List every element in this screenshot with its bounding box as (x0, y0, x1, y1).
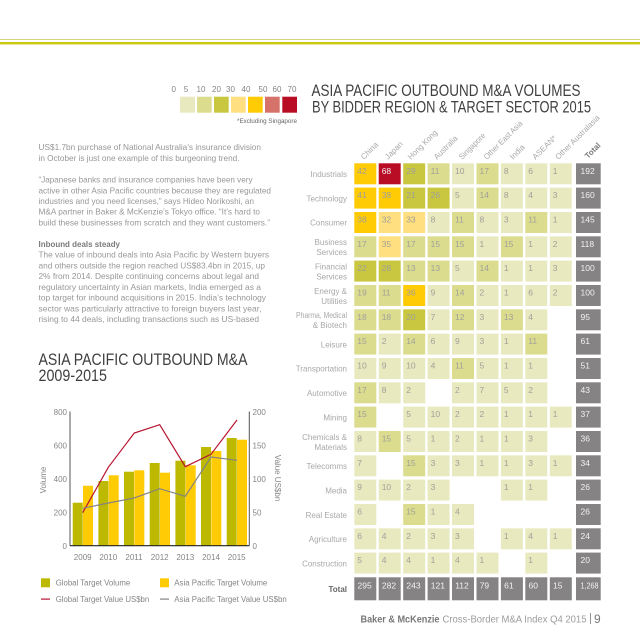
row: Technology: 26 (431, 190, 440, 200)
row: Pharma, Medical and Biotech: 18 (357, 312, 367, 322)
row: Industrials: 192 (580, 166, 595, 176)
heatmap: row labels (296, 170, 348, 594)
row: Industrials: 11 (431, 166, 440, 176)
heatmap: row labels: Telecomms (307, 462, 347, 471)
row: Financial Services (354, 261, 601, 282)
row: Total (354, 577, 601, 600)
row: Technology: 160 (580, 190, 595, 200)
chart legend: Global Target Value US$bn (56, 595, 149, 604)
chart legend: Asia Pacific Target Value US$bn (174, 595, 287, 604)
row: Pharma, Medical and Biotech (354, 309, 601, 330)
heatmap: row labels: Services (316, 272, 347, 281)
row: Consumer: 33 (406, 214, 416, 224)
row: Total: 15 (553, 580, 563, 590)
row: Total: 112 (455, 580, 469, 590)
axis labels: 400 (54, 475, 68, 484)
row: Technology: 8 (504, 190, 509, 200)
row: Industrials: 68 (382, 166, 391, 176)
row: Technology: 4 (528, 190, 533, 200)
row: Mining: 2 (480, 409, 484, 419)
heatmap column headers: Australia (432, 133, 460, 161)
axis labels: 2010 (99, 553, 118, 562)
heatmap: row labels: Technology (307, 194, 347, 203)
axis labels: Value US$bn (273, 455, 282, 501)
axis labels: 0 (252, 542, 258, 551)
row: Agriculture: 24 (580, 531, 590, 541)
heatmap: row labels: Business (315, 238, 347, 247)
row: Transportation: 10 (357, 360, 367, 370)
heatmap column headers: China (359, 140, 381, 161)
row: Automotive: 2 (406, 385, 411, 395)
row: Automotive: 17 (357, 385, 367, 395)
axis labels: 2015 (228, 553, 246, 562)
row: Agriculture: 4 (382, 531, 387, 541)
row: Technology: 5 (455, 190, 460, 200)
row: Business Services: 1 (480, 239, 484, 249)
row: Pharma, Medical and Biotech: 7 (431, 312, 436, 322)
row: Financial Services: 13 (406, 263, 416, 273)
axis labels: 0 (63, 542, 68, 551)
row: Business Services (354, 236, 601, 257)
row: Energy and Utilities: 100 (580, 288, 595, 298)
row: Business Services: 2 (553, 239, 558, 249)
row: Financial Services: 13 (431, 263, 440, 273)
text block: article body: M&A partner in Baker & McKenzie’s Tokyo office. “It’s hard to (38, 208, 260, 217)
row: Media (354, 480, 601, 501)
heatmap: row labels: Agriculture (309, 535, 348, 544)
heatmap: row labels: Utilities (321, 297, 347, 306)
axis labels: 150 (252, 442, 266, 450)
row: Mining (354, 407, 601, 428)
row: Chemicals and Materials: 36 (580, 434, 590, 444)
legend: heatmap colour scale: 60 (273, 85, 282, 94)
axis labels: 100 (252, 475, 266, 484)
heatmap: row labels: Real Estate (306, 511, 348, 520)
row: Financial Services: 22 (357, 263, 367, 273)
row: Energy and Utilities: 9 (431, 288, 436, 298)
row: Agriculture (354, 528, 601, 549)
row: Business Services: 15 (455, 239, 465, 249)
row: Consumer: 145 (580, 214, 595, 224)
row: Leisure (354, 334, 601, 355)
heatmap: row labels: Construction (302, 559, 347, 568)
row: Real Estate: 26 (580, 506, 590, 516)
text block: article body: US$1.7bn purchase of National Australia’s insurance division (38, 143, 261, 152)
heatmap column headers: Japan (383, 140, 405, 161)
row: Chemicals and Materials: 5 (406, 434, 411, 444)
text block: article body: active in other Asia Pacific countries because they are regulated (38, 186, 271, 196)
heatmap: row labels: Transportation (296, 365, 347, 374)
row: Total: 121 (431, 580, 445, 590)
row: Consumer: 11 (528, 214, 537, 224)
row: Chemicals and Materials: 1 (480, 434, 484, 444)
text block: article body: Inbound deals steady (38, 240, 120, 249)
legend: heatmap colour scale: 30 (226, 85, 235, 94)
legend: heatmap colour scale: 10 (197, 85, 206, 94)
row: Media: 2 (406, 482, 411, 492)
chart legend (41, 578, 287, 604)
row: Financial Services: 3 (553, 263, 558, 273)
row: Financial Services: 14 (480, 263, 489, 273)
row: Automotive (354, 382, 601, 403)
row: Chemicals and Materials (354, 431, 601, 452)
row: Consumer (354, 212, 601, 233)
row: Industrials: 6 (528, 166, 533, 176)
row: Agriculture: 1 (553, 531, 558, 541)
row: Mining: 10 (431, 409, 440, 419)
row: Chemicals and Materials: 3 (528, 434, 533, 444)
row: Media: 1 (504, 482, 509, 492)
row: Total: 79 (480, 580, 489, 590)
axis labels: 200 (54, 508, 68, 518)
axis labels: 2014 (202, 553, 220, 562)
row: Total: 1,268 (580, 580, 599, 590)
heatmap: row labels: Financial (315, 262, 347, 271)
row: Agriculture: 4 (528, 531, 533, 541)
row: Media: 9 (357, 482, 362, 492)
row: Agriculture: 3 (431, 531, 436, 541)
row: Pharma, Medical and Biotech: 12 (455, 312, 465, 322)
row: Technology (354, 188, 601, 209)
row: Financial Services: 100 (580, 263, 595, 273)
row: Business Services: 1 (528, 239, 533, 249)
row: Agriculture: 2 (406, 531, 411, 541)
heatmap: row labels: Industrials (311, 170, 347, 179)
legend: heatmap colour scale: 50 (259, 85, 268, 94)
row: Mining: 2 (455, 409, 460, 419)
row: Leisure: 11 (528, 336, 537, 346)
row: Total: 282 (382, 580, 396, 590)
row: Business Services: 35 (382, 239, 391, 249)
row: Industrials: 42 (357, 166, 367, 176)
row: Pharma, Medical and Biotech: 3 (480, 312, 484, 322)
axis labels: 2012 (151, 553, 169, 562)
row: Leisure: 6 (431, 336, 436, 346)
heatmap: row labels: Mining (323, 413, 347, 422)
row: Business Services: 15 (504, 239, 514, 249)
row: Mining: 1 (504, 409, 509, 419)
row: Mining: 37 (580, 409, 590, 419)
row: Automotive: 43 (580, 385, 590, 395)
text block: article body: rising to 44 deals, including transactions such as US-based (38, 315, 259, 324)
row: Leisure: 3 (480, 336, 484, 346)
axis labels: 200 (252, 408, 266, 417)
row: Energy and Utilities: 19 (357, 288, 367, 298)
row: Business Services: 17 (406, 239, 416, 249)
heatmap: row labels: Pharma, Medical (296, 311, 347, 320)
heatmap column headers: Other East Asia (482, 119, 525, 161)
row: Real Estate: 15 (406, 506, 416, 516)
row: Leisure: 61 (580, 336, 590, 346)
text block: article body: sector was particularly attractive to foreign buyers last year, (38, 305, 262, 314)
axis labels: 800 (54, 408, 68, 417)
row: Construction: 1 (431, 555, 436, 565)
row: Consumer: 8 (480, 214, 484, 224)
row: Telecomms: 7 (357, 458, 362, 468)
row: Total: 60 (528, 580, 538, 590)
row: Telecomms: 3 (528, 458, 533, 468)
row: Technology: 21 (406, 190, 416, 200)
row: Automotive: 2 (528, 385, 533, 395)
legend: heatmap colour scale: 0 (171, 85, 176, 94)
row: Automotive: 5 (504, 385, 509, 395)
row: Chemicals and Materials: 2 (455, 434, 460, 444)
row: Industrials (354, 163, 601, 184)
row: Transportation: 51 (580, 360, 590, 370)
line: global target value (83, 420, 237, 513)
row: Industrials: 1 (553, 166, 558, 176)
row: Real Estate (354, 504, 601, 525)
row: Construction: 1 (480, 555, 484, 565)
heatmap: row labels: Materials (315, 443, 347, 452)
heatmap: row labels: & Biotech (313, 321, 347, 330)
row: Transportation: 11 (455, 360, 464, 370)
row: Media: 10 (382, 482, 391, 492)
axis labels: 50 (252, 508, 262, 518)
footer: page credit and number: Baker & McKenzie (360, 615, 440, 626)
row: Total: 243 (406, 580, 421, 590)
row: Technology: 3 (553, 190, 558, 200)
legend: heatmap colour scale: 40 (242, 85, 251, 94)
row: Industrials: 8 (504, 166, 509, 176)
text block: article body: “Japanese banks and insurance companies have been very (38, 176, 253, 184)
row: Total: 295 (358, 580, 372, 590)
row: Business Services: 17 (357, 239, 367, 249)
row: Consumer: 1 (553, 214, 558, 224)
text block: article body: The value of inbound deals into Asia Pacific by Western buyers (38, 250, 269, 260)
heatmap: row labels: Energy & (314, 287, 348, 296)
row: Automotive: 7 (480, 385, 484, 395)
heatmap column headers: Singapore (457, 131, 488, 161)
row: Agriculture: 6 (357, 531, 362, 541)
row: Mining: 1 (553, 409, 558, 419)
row: Construction: 4 (382, 555, 387, 565)
row: Telecomms: 3 (455, 458, 460, 468)
row: Transportation: 9 (382, 360, 387, 370)
title: chart heading (38, 350, 248, 385)
heatmap: row labels: Media (325, 486, 348, 495)
row: Energy and Utilities: 1 (504, 288, 509, 298)
heatmap: row labels: Automotive (307, 389, 348, 398)
row: Agriculture: 1 (504, 531, 509, 541)
legend: heatmap colour scale: 20 (212, 85, 221, 94)
row: Leisure: 1 (504, 336, 509, 346)
text block: article body: build these businesses from scratch and they want customers.” (38, 218, 270, 227)
text block: article body: top target for inbound acquisitions in 2015. India’s technology (38, 294, 267, 303)
footer: page credit and number (360, 612, 601, 626)
axis labels: 2011 (125, 553, 143, 562)
row: Energy and Utilities: 6 (528, 288, 533, 298)
axis labels (39, 408, 282, 562)
heatmap column headers: Other Australasia (554, 113, 602, 161)
row: Pharma, Medical and Biotech: 18 (382, 312, 391, 322)
heatmap: row labels: Leisure (321, 340, 348, 349)
text block: article body: and others outside the region reached US$83.4bn in 2015, up (38, 261, 265, 270)
row: Construction: 20 (580, 555, 590, 565)
row: Pharma, Medical and Biotech: 4 (528, 312, 533, 322)
row: Consumer: 11 (455, 214, 464, 224)
row: Energy and Utilities: 36 (406, 288, 416, 298)
heatmap: row labels: Chemicals & (302, 433, 348, 442)
row: Automotive: 2 (455, 385, 460, 395)
row: Industrials: 10 (455, 166, 465, 176)
row: Telecomms: 1 (553, 458, 558, 468)
row: Media: 1 (528, 482, 533, 492)
heatmap column headers: ASEAN* (531, 134, 558, 161)
text block: article body: 2% from 2014. Despite continuing concerns about legal and (38, 272, 259, 281)
title: chart heading: 2009-2015 (38, 366, 107, 385)
row: Leisure: 2 (382, 336, 387, 346)
row: Telecomms: 1 (504, 458, 509, 468)
row: Transportation: 4 (431, 360, 436, 370)
row: Real Estate: 1 (431, 506, 436, 516)
row: Chemicals and Materials: 1 (504, 434, 509, 444)
row: Industrials: 17 (480, 166, 489, 176)
axes (70, 412, 249, 546)
row: Real Estate: 4 (455, 506, 460, 516)
row: Technology: 14 (480, 190, 489, 200)
line: asia pacific target value (83, 457, 237, 508)
row: Technology: 38 (382, 190, 391, 200)
row: Financial Services: 1 (528, 263, 533, 273)
legend: heatmap colour scale: 5 (184, 85, 189, 94)
row: Transportation: 1 (504, 360, 509, 370)
row: Mining: 5 (406, 409, 411, 419)
combo chart: volume bars and value lines (39, 408, 282, 562)
row: Business Services: 15 (431, 239, 440, 249)
row: Construction: 5 (357, 555, 362, 565)
row: Energy and Utilities: 14 (455, 288, 465, 298)
text block: article body: regulatory uncertainty in Asian markets, India emerged as a (38, 283, 261, 292)
row: Consumer: 32 (382, 214, 391, 224)
title: heatmap heading (312, 81, 591, 116)
row: Energy and Utilities: 11 (382, 288, 391, 298)
row: Construction (354, 553, 601, 574)
row: Transportation (354, 358, 601, 379)
axis labels: 2013 (176, 553, 195, 562)
row: Technology: 41 (357, 190, 367, 200)
row: Chemicals and Materials: 1 (431, 434, 436, 444)
row: Leisure: 14 (406, 336, 416, 346)
heatmap column headers (359, 113, 603, 161)
row: Transportation: 10 (406, 360, 416, 370)
bars: global target volume (73, 438, 237, 546)
row: Construction: 1 (528, 555, 533, 565)
chart legend: Global Target Volume (56, 578, 131, 588)
row: Financial Services: 28 (382, 263, 391, 273)
legend: heatmap colour scale: *Excluding Singapore (237, 118, 297, 125)
row: Construction: 4 (455, 555, 460, 565)
row: Leisure: 9 (455, 336, 460, 346)
axis labels: 2009 (74, 553, 92, 562)
chart legend: Asia Pacific Target Volume (174, 578, 268, 588)
row: Pharma, Medical and Biotech: 13 (504, 312, 514, 322)
row: Energy and Utilities: 2 (553, 288, 558, 298)
row: Consumer: 3 (504, 214, 509, 224)
axis labels: 600 (54, 442, 68, 450)
row: Consumer: 8 (431, 214, 436, 224)
row: Energy and Utilities (354, 285, 601, 306)
row: Financial Services: 5 (455, 263, 460, 273)
row: Media: 26 (580, 482, 590, 492)
row: Transportation: 5 (480, 360, 484, 370)
text block: article body: in October is just one example of this burgeoning trend. (38, 154, 240, 163)
row: Telecomms: 1 (480, 458, 484, 468)
row: Energy and Utilities: 2 (480, 288, 484, 298)
row: Telecomms: 34 (580, 458, 590, 468)
axis labels: Volume (39, 466, 48, 493)
row: Media: 3 (431, 482, 436, 492)
heatmap: row labels: Consumer (310, 219, 347, 228)
row: Telecomms: 3 (431, 458, 436, 468)
heatmap column headers: India (508, 142, 527, 161)
row: Business Services: 118 (580, 239, 594, 249)
text block: article body: industries and you need licenses,” says Hideo Norikoshi, an (38, 197, 254, 206)
title: chart heading: ASIA PACIFIC OUTBOUND M&A (38, 350, 248, 369)
heatmap column headers: Hong Kong (406, 128, 439, 161)
row: Real Estate: 6 (357, 506, 362, 516)
row: Mining: 15 (357, 409, 367, 419)
row: Construction: 4 (406, 555, 411, 565)
row: Telecomms (354, 455, 601, 476)
row: Automotive: 8 (382, 385, 387, 395)
row: Industrials: 29 (406, 166, 416, 176)
row: Telecomms: 15 (406, 458, 416, 468)
bars: asia pacific target volume (83, 440, 247, 546)
legend: heatmap colour scale: 70 (288, 85, 297, 94)
heatmap column headers: Total (583, 141, 603, 160)
heatmap: row labels: Services (316, 248, 347, 257)
row: Pharma, Medical and Biotech: 20 (406, 312, 416, 322)
row: Mining: 1 (528, 409, 533, 419)
row: Leisure: 15 (357, 336, 367, 346)
footer: page credit and number: 9 (594, 612, 601, 626)
row: Chemicals and Materials: 15 (382, 434, 391, 444)
row: Transportation: 1 (528, 360, 533, 370)
row: Chemicals and Materials: 8 (357, 434, 362, 444)
heatmap: cells and values (354, 163, 601, 600)
row: Pharma, Medical and Biotech: 95 (580, 312, 590, 322)
row: Agriculture: 3 (455, 531, 460, 541)
row: Consumer: 38 (357, 214, 367, 224)
heatmap: row labels: Total (328, 585, 347, 594)
legend: heatmap colour scale (171, 85, 297, 125)
text block: article body (38, 143, 271, 324)
row: Total: 61 (504, 580, 514, 590)
footer: page credit and number: Cross-Border M&A Index Q4 2015 (442, 615, 587, 626)
row: Financial Services: 1 (504, 263, 509, 273)
